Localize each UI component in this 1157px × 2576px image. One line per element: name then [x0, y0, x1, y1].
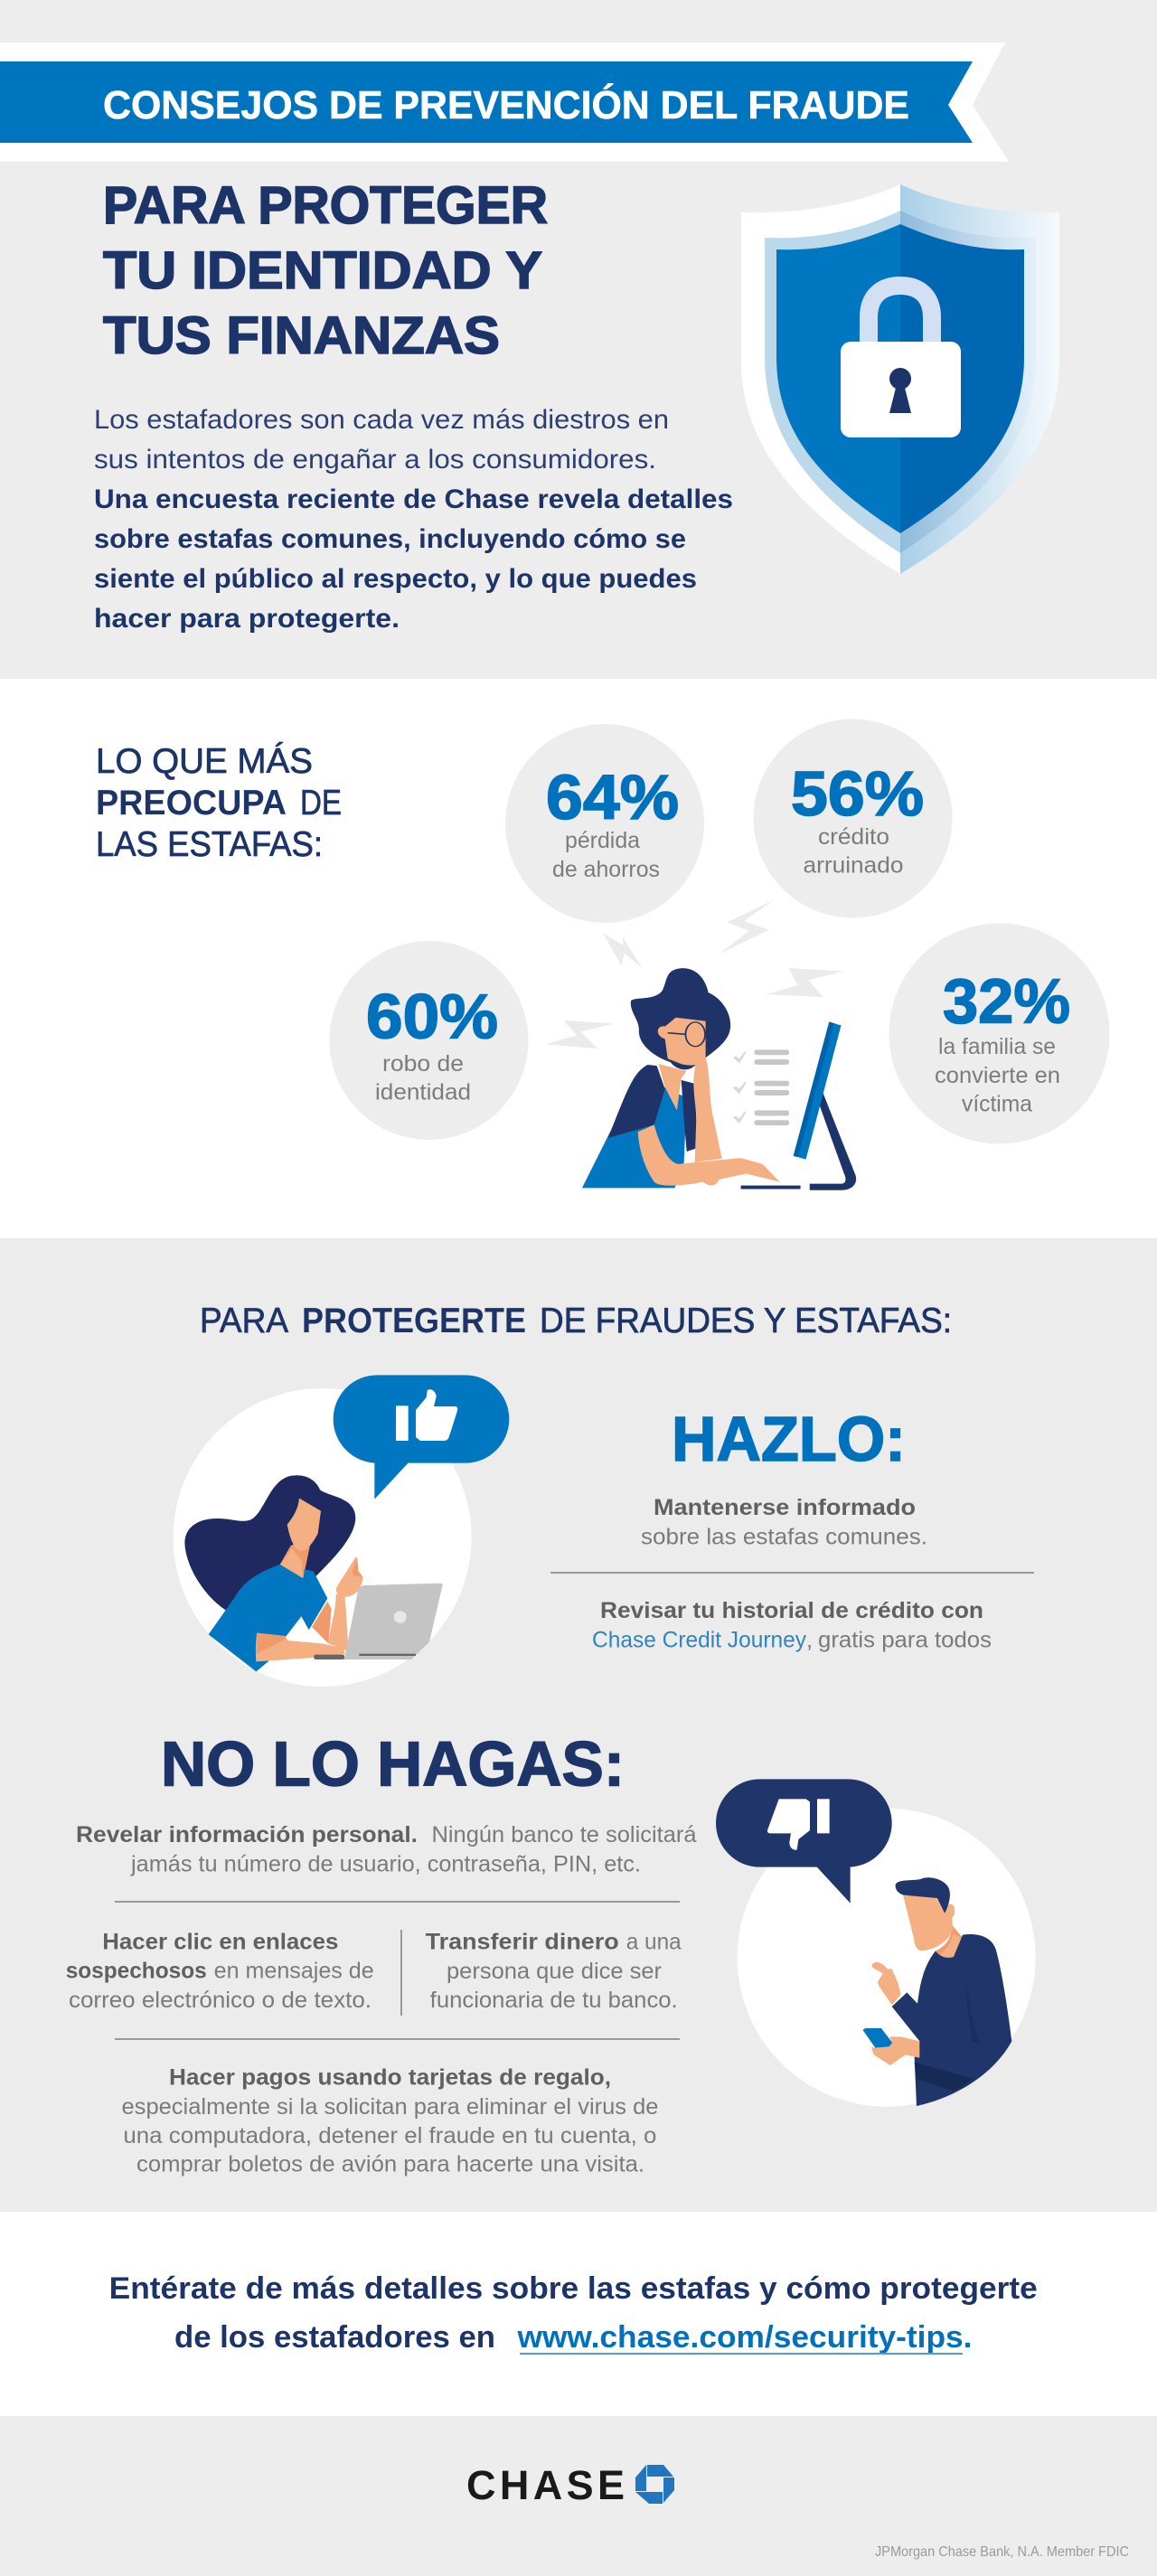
illustration: woman with laptop and thumbs up: [174, 1375, 509, 1687]
tip: stay informed: sobre las estafas comunes.: [641, 1525, 927, 1550]
footer legal text: JPMorgan Chase Bank, N.A. Member FDIC: [875, 2544, 1129, 2560]
white circle: [738, 1809, 1036, 2107]
stat: 32%: convierte en: [935, 1063, 1060, 1088]
stat: 32%: la familia se: [938, 1034, 1056, 1059]
tip: money transfer: Transferir dinero: [426, 1930, 619, 1955]
icon: computer monitor: [741, 1021, 856, 1190]
tip: personal information: [76, 1822, 697, 1877]
logo: Chase: CHASE: [466, 2462, 625, 2508]
panel: worries background: [0, 679, 1157, 1238]
stat: 64%: [505, 724, 704, 923]
icon: laptop: [314, 1584, 443, 1659]
stat: 56%: crédito: [818, 824, 889, 850]
tip: money transfer: persona que dice ser: [447, 1959, 662, 1984]
tip: review credit: gratis para todos: [818, 1628, 992, 1653]
stat: 64%: pérdida: [565, 828, 640, 853]
tip: gift cards: especialmente si la solicitan para eliminar el virus de: [121, 2094, 658, 2120]
call to action: Entérate de más detalles sobre las estafas y cómo protegerte: [109, 2271, 1038, 2306]
heading: protect yourself: DE FRAUDES Y ESTAFAS:: [540, 1302, 952, 1340]
tip: gift cards: comprar boletos de avión para hacerte una visita.: [136, 2152, 644, 2177]
intro paragraph: siente el público al respecto, y lo que puedes: [94, 564, 697, 594]
figure: woman: [184, 1475, 363, 1671]
heading: worries: LO QUE MÁS: [96, 742, 313, 781]
call to action: [109, 2271, 1038, 2355]
main heading: TU IDENTIDAD Y: [103, 241, 542, 300]
illustration: worried woman at computer: [545, 900, 856, 1190]
intro paragraph: sobre estafas comunes, incluyendo cómo se: [94, 524, 686, 554]
icon: shield with padlock: [741, 184, 1059, 574]
tip: personal information: jamás tu número de usuario, contraseña, PIN, etc.: [130, 1852, 641, 1877]
heading: worries: LAS ESTAFAS:: [96, 825, 323, 864]
call to action: www.chase.com/security-tips.: [516, 2320, 973, 2355]
tip: personal information: Revelar información personal.: [76, 1822, 418, 1847]
banner ribbon: [0, 42, 1009, 162]
tip: stay informed: [641, 1495, 927, 1550]
stat: 60%: [329, 941, 528, 1140]
stat: 60%: identidad: [375, 1079, 471, 1105]
panel: intro background: [0, 0, 1157, 679]
tip: suspicious links: Hacer clic en enlaces: [102, 1930, 338, 1955]
tip: review credit: [592, 1598, 992, 1653]
speech bubble: thumbs up: [334, 1375, 509, 1500]
stat: 64%: 64%: [546, 762, 679, 832]
stat: 32%: víctima: [962, 1092, 1032, 1117]
heading: protect yourself: PROTEGERTE: [302, 1302, 526, 1340]
tip: gift cards: [121, 2065, 658, 2177]
heading: do: HAZLO:: [672, 1404, 906, 1474]
intro paragraph: Una encuesta reciente de Chase revela detalles: [94, 484, 733, 514]
tip: stay informed: Mantenerse informado: [654, 1495, 916, 1520]
call to action: de los estafadores en: [174, 2320, 495, 2355]
tip: gift cards: Hacer pagos usando tarjetas de regalo,: [169, 2065, 611, 2091]
banner title: CONSEJOS DE PREVENCIÓN DEL FRAUDE: [103, 82, 909, 127]
stat: 64%: de ahorros: [552, 857, 660, 882]
icon: lightning bolts: [545, 900, 844, 1048]
main heading: PARA PROTEGER: [103, 176, 548, 235]
stat: 56%: 56%: [791, 758, 924, 829]
tip: review credit: Revisar tu historial de crédito con: [600, 1598, 983, 1623]
tip: suspicious links: en mensajes de: [214, 1959, 374, 1984]
panel: footer background: [0, 2416, 1157, 2576]
stat: 60%: 60%: [366, 982, 498, 1052]
tip: personal information: Ningún banco te solicitará: [432, 1822, 697, 1847]
heading: worries: DE: [300, 784, 342, 823]
panel: tips background: [0, 1238, 1157, 2212]
stat: 32%: 32%: [943, 965, 1070, 1036]
white circle: [174, 1388, 472, 1687]
tip: money transfer: [426, 1930, 682, 2013]
main heading: TUS FINANZAS: [103, 306, 500, 365]
heading: worries: [96, 742, 342, 864]
heading: protect yourself: PARA: [200, 1302, 288, 1340]
heading: worries: PREOCUPA: [96, 784, 287, 823]
heading: don't: NO LO HAGAS:: [161, 1728, 625, 1799]
heading: protect yourself: [200, 1302, 952, 1340]
intro paragraph: Los estafadores son cada vez más diestros en: [94, 405, 669, 435]
figure: woman: [582, 968, 780, 1188]
stat: 32%: [889, 924, 1110, 1144]
icon: checklist: [733, 1049, 789, 1125]
tip: gift cards: una computadora, detener el fraude en tu cuenta, o: [123, 2123, 656, 2148]
icon: octagon: [635, 2465, 674, 2504]
tip: review credit: Chase Credit Journey: [592, 1628, 806, 1653]
stat: 56%: arruinado: [803, 853, 904, 879]
speech bubble: thumbs down: [716, 1779, 892, 1904]
intro paragraph: [94, 405, 733, 634]
tip: suspicious links: [66, 1930, 374, 2013]
main heading: [103, 176, 548, 365]
tip: money transfer: funcionaria de tu banco.: [430, 1988, 678, 2013]
intro paragraph: hacer para protegerte.: [94, 604, 400, 634]
stat: 60%: robo de: [382, 1051, 464, 1076]
tip: review credit: ,: [806, 1628, 813, 1653]
figure: man: [863, 1877, 1011, 2106]
illustration: man with phone and thumbs down: [716, 1779, 1036, 2107]
stat: 56%: [754, 719, 953, 918]
intro paragraph: sus intentos de engañar a los consumidores.: [94, 445, 656, 475]
tip: money transfer: a una: [626, 1930, 682, 1955]
tip: suspicious links: sospechosos: [66, 1959, 207, 1984]
panel: call to action background: [0, 2212, 1157, 2416]
tip: suspicious links: correo electrónico o de texto.: [69, 1988, 372, 2013]
